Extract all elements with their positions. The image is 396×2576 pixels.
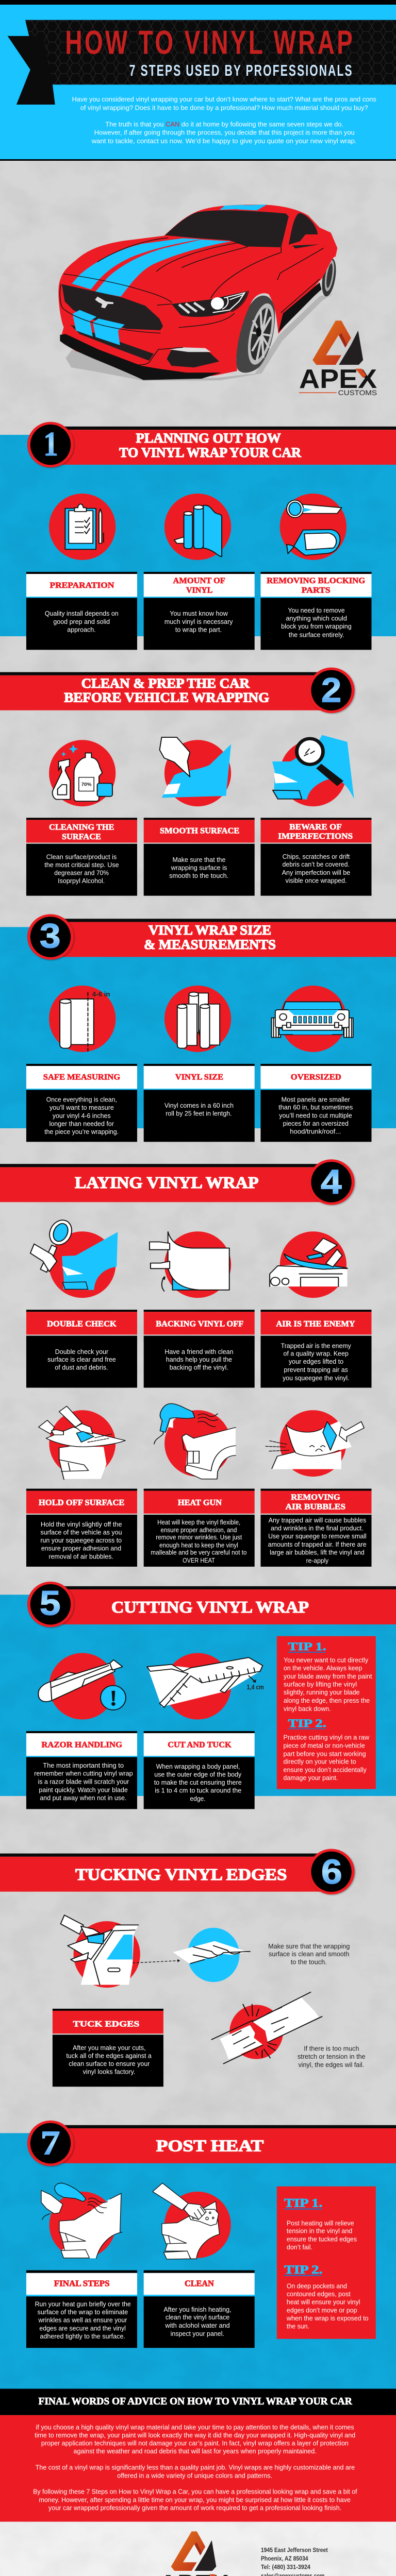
card: removing air bubbles: [260, 1489, 371, 1567]
text: advice paragraphs: your car wrapped professionally given the amount of work required to get a professional looking finish.: [48, 2503, 341, 2512]
panel: cutting tips: along the edge, then press the: [284, 1697, 370, 1704]
card: air is the enemy: prevent trapping air as: [284, 1366, 348, 1374]
card: final steps: surface of the wrap to eliminate: [37, 2308, 128, 2316]
card: heat gun: OVER HEAT: [183, 1556, 215, 1564]
panel: post heat tips: don’t fail.: [287, 2243, 312, 2251]
card: hold off surface: ensure proper adhesion and: [41, 1545, 121, 1552]
card: double check: of dust and debris.: [55, 1364, 108, 1371]
card: double check: [26, 1310, 137, 1388]
card: cleaning the surface: [26, 818, 137, 896]
footer contact details: Tel: (480) 331-3924: [261, 2564, 310, 2571]
panel: cutting tips: your blade away from the paint: [284, 1672, 372, 1680]
header 4: [0, 1159, 355, 1205]
header 7: POST HEAT: [156, 2138, 263, 2155]
icon: three white rolls: [164, 986, 231, 1052]
card: razor handling: RAZOR HANDLING: [41, 1740, 122, 1750]
card: preparation: good prep and solid: [53, 618, 110, 625]
card: tuck edges: vinyl looks factory.: [83, 2068, 136, 2076]
card: removing blocking parts: anything which could: [286, 615, 347, 622]
card: hold off surface: [26, 1489, 137, 1567]
card: cleaning the surface: Isoprpyl Alcohol.: [58, 877, 105, 885]
panel: post heat tips: when the wrap is exposed to: [286, 2314, 369, 2322]
header 5: 5: [40, 1584, 61, 1622]
panel: post heat tips: TIP 1.: [284, 2196, 322, 2210]
header 2: BEFORE VEHICLE WRAPPING: [64, 690, 269, 705]
panel: cutting tips: [277, 1636, 376, 1789]
icon: vinyl rolls: [164, 494, 231, 560]
card: preparation: Quality install depends on: [45, 610, 119, 617]
card: cleaning the surface: CLEANING THE: [49, 822, 114, 832]
card: clean: [144, 2270, 255, 2348]
icon: heat gun: [154, 1403, 236, 1479]
header 2: [0, 668, 355, 713]
card: final steps: FINAL STEPS: [54, 2279, 110, 2289]
text: advice paragraphs: if you choose a high quality vinyl wrap material and take your time to pay attention to the details, when it comes: [36, 2423, 354, 2431]
section 5: cutting vinyl wrap: [26, 1582, 396, 1809]
card: removing air bubbles: re-apply: [306, 1557, 328, 1565]
icon: measuring roll: 4-6 in: [92, 991, 110, 998]
panel: cutting tips: surface by lifting the vinyl: [284, 1681, 357, 1688]
icon: backing vinyl off: [150, 1231, 231, 1298]
card: removing air bubbles: large air bubbles, lift the vinyl and: [270, 1549, 365, 1556]
icon: air is the enemy: [270, 1231, 347, 1298]
icon: razor knife: [38, 1653, 126, 1720]
section 2: clean and prep: [0, 668, 371, 896]
card: razor handling: remember when cutting vinyl wrap: [34, 1770, 133, 1777]
panel: cutting tips: TIP 1.: [288, 1640, 326, 1653]
card: final steps: Run your heat gun briefly over the: [35, 2300, 131, 2308]
header 2: 2: [321, 671, 341, 709]
red mustang car illustration: [58, 205, 338, 381]
icon: cut and tuck edge: [147, 1653, 264, 1720]
panel: cutting tips: directly on your vehicle to: [284, 1758, 356, 1765]
card: final steps: [26, 2270, 137, 2348]
header 7: 7: [40, 2124, 60, 2162]
icon: torn stretched vinyl: [211, 1992, 322, 2064]
text: tension note: [298, 2045, 366, 2069]
text: advice paragraphs: The cost of a vinyl wrap is significantly less than a quality paint job. Vinyl wraps are highly customizable and are: [36, 2463, 355, 2471]
panel: cutting tips: piece of metal or non-vehicle: [284, 1742, 365, 1750]
icon: sponge on car: [153, 2183, 231, 2259]
card: backing vinyl off: BACKING VINYL OFF: [156, 1319, 243, 1328]
card: oversized: pieces for an oversized: [283, 1120, 349, 1127]
card: beware of imperfections: visible once wrapped.: [285, 877, 346, 885]
card: hold off surface: removal of air bubbles.: [49, 1553, 113, 1560]
card: oversized: hood/trunk/roof...: [290, 1128, 341, 1136]
card: oversized: [260, 1064, 371, 1142]
text: advice paragraphs: proper application techniques will not damage your car’s paint. In fact, vinyl wrap offers a layer of protection: [41, 2439, 349, 2447]
card: hold off surface: surface of the vehicle as you: [40, 1529, 122, 1536]
card: amount of vinyl: You must know how: [170, 610, 228, 617]
header 3: & MEASUREMENTS: [144, 937, 276, 952]
card: vinyl size: [144, 1064, 255, 1142]
header 1: [27, 422, 396, 467]
card: clean: CLEAN: [185, 2279, 214, 2289]
card: razor handling: [26, 1731, 137, 1809]
header 1: 1: [43, 425, 58, 463]
footer contact details: Phoenix, AZ 85034: [261, 2555, 308, 2562]
card: beware of imperfections: IMPERFECTIONS: [278, 832, 353, 841]
card: heat gun: [144, 1489, 255, 1567]
panel: post heat tips: tension in the vinyl and: [287, 2227, 352, 2235]
card: removing blocking parts: You need to remove: [288, 607, 345, 614]
card: hold off surface: HOLD OFF SURFACE: [39, 1498, 124, 1507]
panel: cutting tips: part before you start working: [284, 1750, 366, 1757]
card: smooth surface: SMOOTH SURFACE: [160, 826, 239, 835]
header 5: CUTTING VINYL WRAP: [111, 1599, 309, 1617]
icon: cleaning bottles: [49, 740, 116, 806]
text: advice paragraphs: time to remove the wrap, your paint will look exactly the way it did the day your wrapped it. High-quality vinyl and: [35, 2431, 355, 2439]
card: smooth surface: Make sure that the: [173, 856, 225, 863]
card: cut and tuck: CUT AND TUCK: [168, 1740, 232, 1750]
card: cleaning the surface: Clean surface/product is: [46, 853, 117, 861]
card: heat gun: ensure proper adhesion, and: [161, 1526, 237, 1534]
intro text: The truth is that you CAN do it at home by following the same seven steps we do.: [105, 121, 343, 128]
header 3: [27, 914, 396, 960]
card: backing vinyl off: hands help you pull the: [166, 1356, 232, 1363]
header 4: LAYING VINYL WRAP: [75, 1174, 259, 1192]
card: final steps: adhered tightly to the surface.: [40, 2332, 125, 2340]
Apex Customs logo: [299, 320, 377, 397]
card: safe measuring: longer than needed for: [50, 1120, 114, 1127]
panel: cutting tips: slightly, running your blade: [284, 1689, 359, 1696]
header 1: TO VINYL WRAP YOUR CAR: [119, 445, 301, 460]
card: heat gun: HEAT GUN: [178, 1498, 222, 1507]
card: amount of vinyl: to wrap the part.: [175, 626, 222, 633]
header 4: 4: [321, 1162, 342, 1201]
card: smooth surface: wrapping surface is: [171, 864, 227, 872]
footer contact details: [260, 2547, 328, 2576]
panel: cutting tips: TIP 2.: [288, 1717, 326, 1730]
text: tension note: vinyl, the edges wil fail.: [298, 2061, 364, 2069]
panel: post heat tips: ensure the tucked edges: [287, 2235, 357, 2243]
card: air is the enemy: of a quality wrap. Keep: [284, 1350, 349, 1357]
card: safe measuring: Once everything is clean,: [46, 1096, 117, 1103]
card: removing air bubbles: Use your squeege to remove small: [268, 1533, 367, 1540]
card: double check: Double check your: [55, 1348, 109, 1355]
card: air is the enemy: [260, 1310, 371, 1388]
card: removing blocking parts: the surface entirely.: [289, 631, 344, 638]
icon: squeegee bubbles: [266, 1410, 364, 1477]
card: razor handling: is a razor blade will scratch your: [38, 1778, 129, 1785]
panel: post heat tips: TIP 2.: [284, 2263, 322, 2276]
card: heat gun: enough heat to keep the vinyl: [159, 1541, 238, 1549]
icon: tucked edge detail: [173, 1928, 250, 1982]
card: final steps: wrinkles as well as ensure your: [38, 2316, 127, 2324]
header 3: 3: [40, 917, 61, 955]
card: backing vinyl off: backing off the vinyl.: [170, 1364, 228, 1371]
header 1: PLANNING OUT HOW: [136, 431, 281, 446]
section 7: post heat: [26, 2121, 396, 2348]
card: beware of imperfections: debris can’t be covered.: [283, 861, 350, 868]
panel: post heat tips: On deep pockets and: [287, 2282, 347, 2290]
header 3: VINYL WRAP SIZE: [148, 923, 271, 938]
icon: cleaning bottles: 70%: [81, 782, 92, 787]
card: safe measuring: your vinyl 4-6 inches: [53, 1112, 111, 1120]
card: cut and tuck: use the outer edge of the body: [154, 1771, 241, 1778]
text: wrapping surface note: Make sure that the wrapping: [268, 1943, 350, 1950]
card: oversized: OVERSIZED: [291, 1072, 341, 1081]
text: wrapping surface note: surface is clean and smooth: [269, 1951, 349, 1958]
header 6: TUCKING VINYL EDGES: [75, 1866, 287, 1884]
icon: cut and tuck edge: 1,4 cm: [247, 1683, 264, 1691]
card: beware of imperfections: BEWARE OF: [289, 822, 342, 832]
header 6: [0, 1849, 355, 1894]
text: tension note: If there is too much: [304, 2045, 359, 2052]
heading: final words: FINAL WORDS OF ADVICE ON HOW TO VINYL WRAP YOUR CAR: [38, 2396, 353, 2407]
text: advice paragraphs: against the weather and road debris that will last for years when properly maintained.: [74, 2447, 317, 2455]
card: removing blocking parts: REMOVING BLOCKING: [267, 576, 365, 585]
card: tuck edges: After you make your cuts,: [73, 2044, 146, 2052]
section 6: tucking vinyl edges: [0, 1849, 366, 2087]
header 7: [27, 2121, 396, 2166]
card: preparation: approach.: [67, 626, 96, 633]
card: cut and tuck: edge.: [190, 1795, 206, 1802]
intro text: Have you considered vinyl wrapping your car but don’t know where to start? What are the pros and cons: [72, 96, 376, 103]
ribbon: [8, 20, 396, 105]
panel: post heat tips: contoured edges, post: [287, 2290, 351, 2298]
card: preparation: PREPARATION: [50, 580, 114, 590]
card: amount of vinyl: VINYL: [186, 585, 212, 595]
header 5: [27, 1582, 396, 1627]
card: safe measuring: you’ll want to measure: [50, 1104, 114, 1111]
footer contact details: 1945 East Jefferson Street: [261, 2547, 328, 2554]
card: removing air bubbles: AIR BUBBLES: [285, 1502, 345, 1511]
card: tuck edges: [53, 2009, 163, 2087]
card: air is the enemy: your edges lifted to: [289, 1358, 343, 1365]
text: tension note: stretch or tension in the: [298, 2053, 366, 2060]
card: heat gun: Heat will keep the vinyl flexible,: [157, 1519, 240, 1526]
panel: cutting tips: ensure you don’t accidentally: [284, 1766, 367, 1773]
card: vinyl size: roll by 25 feet in lentgh.: [166, 1110, 232, 1117]
card: clean: clean the vinyl surface: [166, 2313, 229, 2321]
card: final steps: edges are secure and the vinyl: [39, 2324, 126, 2332]
card: tuck edges: clean surface to ensure your: [69, 2060, 150, 2067]
card: beware of imperfections: Any imperfection will be: [282, 869, 350, 876]
panel: cutting tips: damage your paint.: [284, 1774, 338, 1782]
card: safe measuring: SAFE MEASURING: [43, 1072, 120, 1081]
section 3: size and measurements: [26, 914, 396, 1142]
card: oversized: Most panels are smaller: [282, 1096, 350, 1103]
card: heat gun: remove minor wrinkles. Use just: [156, 1534, 242, 1541]
card: razor handling: and put away when not in use.: [40, 1794, 126, 1802]
icon: door handle and mirror: [280, 494, 346, 560]
card: tuck edges: tuck all of the edges against a: [66, 2052, 152, 2059]
card: vinyl size: Vinyl comes in a 60 inch: [164, 1102, 234, 1109]
card: cleaning the surface: SURFACE: [62, 832, 101, 841]
card: razor handling: paint quickly. Watch your blade: [39, 1786, 128, 1793]
hero banner: [0, 0, 396, 161]
panel: final words of advice: [0, 2389, 396, 2522]
card: hold off surface: Hold the vinyl slightly off the: [41, 1520, 122, 1528]
card: vinyl size: VINYL SIZE: [175, 1072, 223, 1081]
icon: magnifier on imperfections: [272, 735, 354, 806]
card: cut and tuck: is 1 to 4 cm to tuck around the: [155, 1787, 241, 1794]
header 6: 6: [321, 1852, 342, 1891]
card: double check: surface is clear and free: [47, 1356, 116, 1363]
card: air is the enemy: Trapped air is the enemy: [281, 1342, 351, 1349]
icon: tucking door edge: [61, 1915, 180, 1988]
text: wrapping surface note: to the touch.: [291, 1958, 327, 1966]
card: cut and tuck: to make the cut ensuring there: [154, 1779, 242, 1786]
text: advice paragraphs: By following these 7 Steps on How to Vinyl Wrap a Car, you can have a professional looking wrap and save a bit of: [33, 2487, 357, 2496]
card: smooth surface: [144, 818, 255, 896]
card: amount of vinyl: much vinyl is necessary: [164, 618, 233, 625]
panel: post heat tips: heat will ensure your vinyl: [287, 2298, 360, 2306]
text: advice paragraphs: money. However, after spending a little time on your wrap, you might be surprised at how little it costs to have: [39, 2496, 351, 2504]
icon: measuring roll: [49, 986, 116, 1052]
intro text: of vinyl wrapping? Does it have to be done by a professional? How much material should you buy?: [80, 104, 368, 111]
card: amount of vinyl: AMOUNT OF: [173, 576, 225, 585]
icon: magnifier double check: [30, 1217, 118, 1298]
intro text: [72, 96, 376, 145]
card: oversized: than 60 in, but sometimes: [278, 1104, 353, 1111]
card: heat gun: malleable and be very careful not to: [151, 1549, 247, 1556]
panel: cutting tips: Practice cutting vinyl on a raw: [284, 1734, 369, 1741]
icon: hold off surface: [39, 1406, 125, 1480]
card: clean: inspect your panel.: [171, 2330, 224, 2337]
card: safe measuring: the piece you’re wrapping.: [44, 1128, 119, 1136]
card: tuck edges: TUCK EDGES: [73, 2019, 139, 2028]
card: oversized: you’ll need to cut multiple: [279, 1112, 352, 1119]
text: wrapping surface note: [268, 1943, 350, 1966]
card: amount of vinyl: [144, 572, 255, 650]
icon: finger on smooth surface: [160, 737, 231, 806]
card: cut and tuck: [144, 1731, 255, 1809]
icon: jeep front: [272, 986, 353, 1052]
card: cleaning the surface: degreaser and 70%: [54, 869, 109, 876]
card: beware of imperfections: [260, 818, 371, 896]
card: preparation: [26, 572, 137, 650]
panel: post heat tips: Post heating will relieve: [287, 2219, 354, 2227]
text: advice paragraphs: [33, 2423, 357, 2512]
card: removing blocking parts: block you from wrapping: [281, 623, 352, 630]
section 1: planning: [26, 422, 396, 650]
section 4: laying vinyl wrap: [0, 1159, 371, 1567]
panel: cutting tips: on the vehicle. Always keep: [284, 1665, 362, 1672]
card: removing blocking parts: [260, 572, 371, 650]
icon: clipboard checklist: [49, 494, 116, 560]
panel: cutting tips: You never want to cut directly: [284, 1656, 368, 1664]
text: advice paragraphs: offered in a wide variety of unique colors and patterns.: [117, 2471, 272, 2480]
card: cleaning the surface: the most critical step. Use: [44, 861, 119, 869]
panel: post heat tips: edges don’t move or pop: [287, 2306, 357, 2314]
header 2: CLEAN & PREP THE CAR: [81, 676, 250, 691]
card: hold off surface: run your squeegee across to: [40, 1537, 122, 1544]
intro text: want to tackle, contact us now. We’d be happy to give you quote on your new vinyl wrap.: [91, 138, 357, 145]
card: double check: DOUBLE CHECK: [47, 1319, 117, 1328]
card: clean: with aclohol water and: [164, 2321, 230, 2329]
card: beware of imperfections: Chips, scratches or drift: [283, 853, 350, 860]
footer logo: [159, 2531, 228, 2576]
panel: post heat tips: the sun.: [287, 2322, 309, 2330]
card: smooth surface: smooth to the touch.: [169, 872, 228, 879]
card: air is the enemy: AIR IS THE ENEMY: [276, 1319, 355, 1328]
card: cut and tuck: When wrapping a body panel,: [156, 1762, 240, 1770]
card: removing air bubbles: amounts of trapped air. If there are: [268, 1541, 367, 1548]
card: removing air bubbles: REMOVING: [291, 1493, 340, 1502]
card: clean: After you finish heating,: [163, 2305, 232, 2313]
card: safe measuring: [26, 1064, 137, 1142]
panel: cutting tips: vinyl back down.: [284, 1705, 331, 1713]
icon: heat gun on car: [41, 2183, 122, 2258]
card: backing vinyl off: Have a friend with clean: [164, 1348, 234, 1355]
card: backing vinyl off: [144, 1310, 255, 1388]
intro text: However, if after going through the process, you decide that this project is more than you: [94, 129, 355, 137]
card: removing blocking parts: PARTS: [302, 585, 331, 595]
card: air is the enemy: you squeegee the vinyl.: [283, 1374, 349, 1382]
card: removing air bubbles: and wrinkles in the final product.: [271, 1524, 364, 1532]
card: razor handling: The most important thing to: [43, 1762, 124, 1769]
panel: post heat tips: [277, 2187, 376, 2339]
card: removing air bubbles: Any trapped air will cause bubbles: [269, 1517, 366, 1524]
